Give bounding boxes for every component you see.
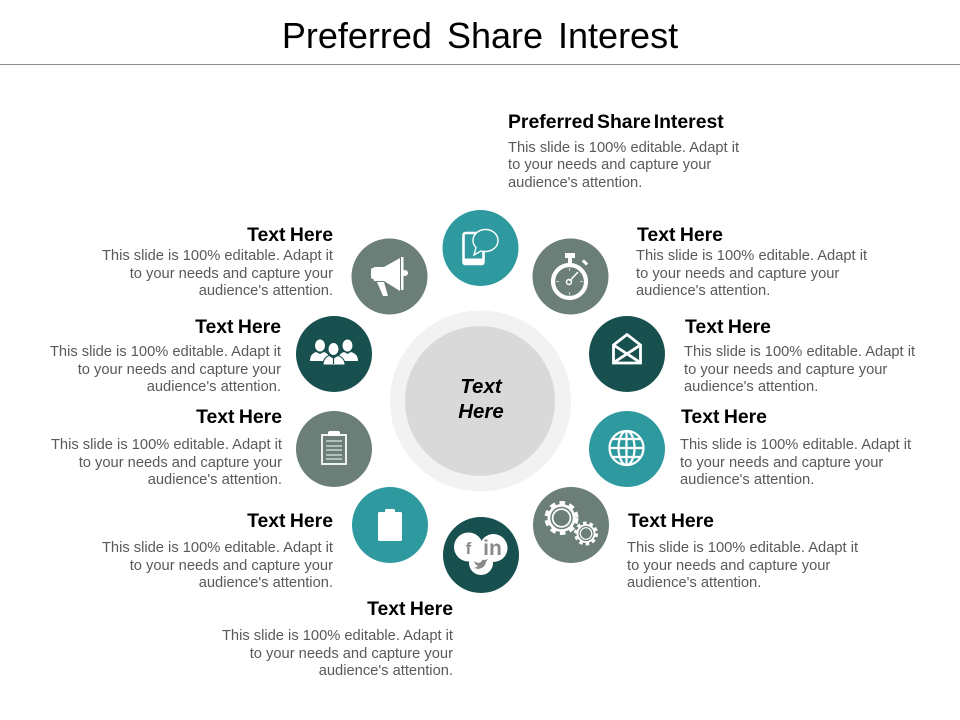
text block: top right: audience's attention. xyxy=(636,283,770,299)
text block: bottom right: Text Here xyxy=(628,510,714,532)
text block: top right: to your needs and capture your xyxy=(636,266,839,282)
text block: left lower: This slide is 100% editable. Adapt it xyxy=(51,437,282,453)
text block: Preferred Share Interest: Preferred Share Interest xyxy=(508,111,724,133)
text block: bottom: This slide is 100% editable. Adapt it xyxy=(222,628,453,644)
text block: top right: This slide is 100% editable. Adapt it xyxy=(636,248,867,264)
text block: bottom xyxy=(222,598,453,679)
text block: top right: Text Here xyxy=(637,224,723,246)
text block: bottom right: This slide is 100% editable. Adapt it xyxy=(627,540,858,556)
text block: bottom right: audience's attention. xyxy=(627,575,761,591)
text block: right lower xyxy=(680,406,911,488)
text block: right upper xyxy=(684,316,915,395)
text block: right lower: to your needs and capture your xyxy=(680,455,883,471)
text block: bottom right: to your needs and capture your xyxy=(627,558,830,574)
text block: top left: to your needs and capture your xyxy=(130,266,333,282)
center label: Text xyxy=(460,375,502,398)
text block: left upper: to your needs and capture your xyxy=(78,362,281,378)
text block: right lower: audience's attention. xyxy=(680,472,814,488)
text block: top right xyxy=(636,224,867,299)
text block: right lower: This slide is 100% editable. Adapt it xyxy=(680,437,911,453)
text block: bottom left: audience's attention. xyxy=(199,575,333,591)
text block: top left xyxy=(102,224,333,299)
text block: left lower: audience's attention. xyxy=(148,472,282,488)
icon: globe xyxy=(589,411,665,487)
center label: Here xyxy=(458,400,504,423)
icon: clipboard xyxy=(296,411,372,487)
text block: right upper: audience's attention. xyxy=(684,379,818,395)
text block: bottom left xyxy=(102,510,333,591)
text block: left upper: This slide is 100% editable. Adapt it xyxy=(50,344,281,360)
text block: bottom right xyxy=(627,510,858,591)
text block: right upper: Text Here xyxy=(685,316,771,338)
center ring xyxy=(390,310,571,492)
text block: Preferred Share Interest: audience's attention. xyxy=(508,175,642,191)
text block: right lower: Text Here xyxy=(681,406,767,428)
text block: left lower xyxy=(51,406,282,488)
icon: gears xyxy=(533,487,609,563)
icon: social cloud: in xyxy=(483,537,502,560)
text block: left upper: audience's attention. xyxy=(147,379,281,395)
text block: left lower: Text Here xyxy=(196,406,282,428)
text block: Preferred Share Interest: This slide is 100% editable. Adapt it xyxy=(508,140,739,156)
text block: bottom: to your needs and capture your xyxy=(250,646,453,662)
text block: bottom left: This slide is 100% editable. Adapt it xyxy=(102,540,333,556)
text block: right upper: This slide is 100% editable. Adapt it xyxy=(684,344,915,360)
icon: battery clipboard xyxy=(352,487,428,563)
text block: left upper: Text Here xyxy=(195,316,281,338)
text block: bottom left: to your needs and capture your xyxy=(130,558,333,574)
text block: bottom: Text Here xyxy=(367,598,453,620)
title: Preferred Share Interest xyxy=(282,15,678,56)
icon: megaphone xyxy=(352,238,428,314)
icon: open envelope xyxy=(589,316,665,392)
icon: phone with speech bubble xyxy=(442,210,518,286)
icon: people group xyxy=(296,316,372,392)
text block: top left: audience's attention. xyxy=(199,283,333,299)
text block: top left: This slide is 100% editable. Adapt it xyxy=(102,248,333,264)
icon: stopwatch xyxy=(532,238,608,314)
text block: bottom left: Text Here xyxy=(247,510,333,532)
text block: left lower: to your needs and capture your xyxy=(79,455,282,471)
icon: social cloud xyxy=(443,517,519,593)
text block: Preferred Share Interest xyxy=(508,111,739,191)
text block: right upper: to your needs and capture your xyxy=(684,362,887,378)
text block: top left: Text Here xyxy=(247,224,333,246)
icon: social cloud: f xyxy=(466,539,472,558)
text block: bottom: audience's attention. xyxy=(319,663,453,679)
text block: Preferred Share Interest: to your needs and capture your xyxy=(508,157,711,173)
text block: left upper xyxy=(50,316,281,395)
center label xyxy=(458,375,504,423)
